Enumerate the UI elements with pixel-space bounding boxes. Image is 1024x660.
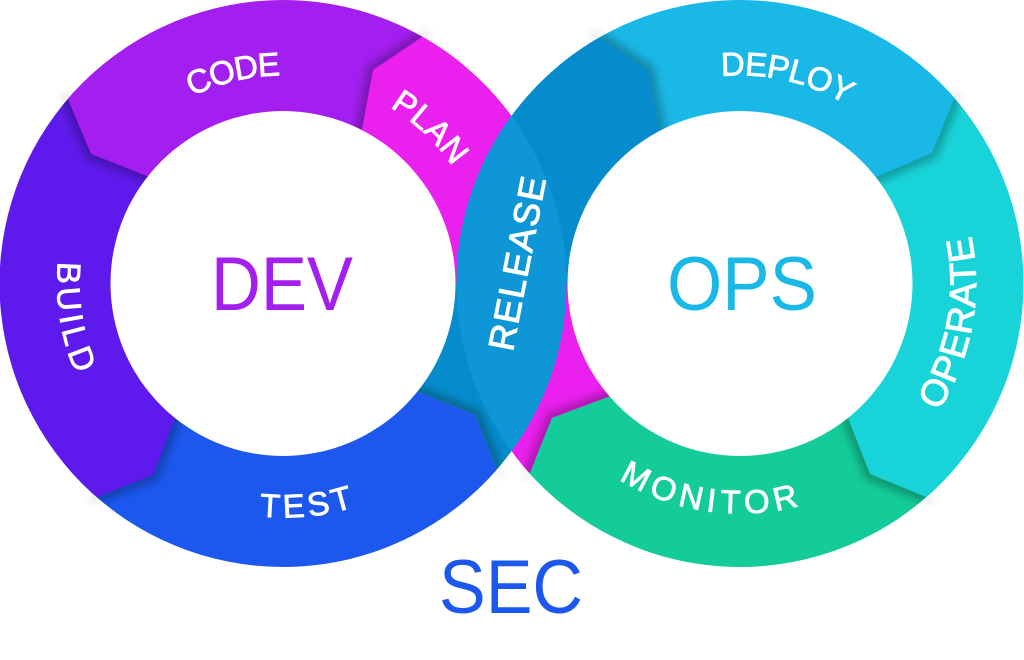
heading: OPS: OPS xyxy=(667,242,817,327)
heading: DEV: DEV xyxy=(211,242,353,327)
inner white circle: ops xyxy=(568,111,912,456)
faint shadow spill onto the background at the outer joints xyxy=(61,30,961,504)
label: OPERATE: OPERATE xyxy=(920,236,977,406)
segment: deploy xyxy=(552,0,958,181)
label: BUILD: BUILD xyxy=(56,264,94,370)
segment: release xyxy=(456,32,661,284)
segment: plan xyxy=(352,31,512,284)
segment: code xyxy=(64,0,471,180)
label: TEST: TEST xyxy=(260,485,348,518)
segment: operate xyxy=(843,60,1024,501)
heading: SEC: SEC xyxy=(439,545,583,630)
label: DEPLOY: DEPLOY xyxy=(722,52,858,100)
segment: build xyxy=(0,60,180,501)
segment: plan lower ribbon (magenta) xyxy=(512,284,610,474)
inner white circle: dev xyxy=(110,111,456,456)
segment: release lower ribbon (blue) xyxy=(409,284,566,479)
label: CODE: CODE xyxy=(187,52,280,93)
segment: test xyxy=(59,386,501,576)
label: MONITOR: MONITOR xyxy=(620,460,798,514)
label: RELEASE: RELEASE xyxy=(488,176,546,350)
overlap lens between rings xyxy=(456,116,566,452)
label: PLAN: PLAN xyxy=(392,89,470,165)
segment: monitor xyxy=(526,386,964,575)
